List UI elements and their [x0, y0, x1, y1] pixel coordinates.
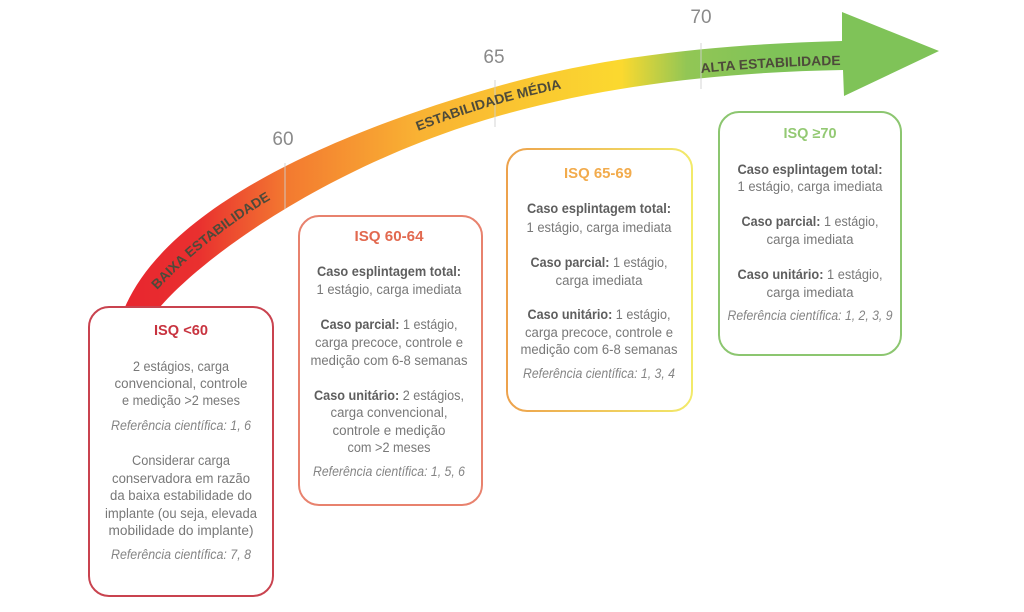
scale tick: 65: 65: [483, 47, 505, 68]
text: partial case: Caso parcial: 1 estágio,: [742, 214, 878, 229]
text: partial case: [530, 255, 668, 288]
text: full arch case: Caso esplintagem total:: [738, 162, 882, 177]
heading: ISQ 65-69: ISQ 65-69: [564, 166, 632, 182]
reference: 7, 8: Referência científica: 7, 8: [111, 547, 251, 562]
text: conservative load: Considerar carga: [132, 453, 230, 468]
reference: 1, 2, 3, 9: Referência científica: 1, 2, 3, 9: [728, 308, 893, 323]
text: single case: carga convencional,: [330, 405, 448, 420]
heading: ISQ under 60: ISQ <60: [154, 323, 208, 339]
text: partial case: carga imediata: [556, 273, 643, 288]
panel: ISQ 65-69: [507, 149, 692, 411]
arrow: stability gradient: [125, 12, 939, 307]
heading: ISQ 70 or more: ISQ ≥70: [784, 126, 836, 142]
text: partial case: carga precoce, controle e: [315, 335, 463, 350]
scale tick: 60: [272, 129, 294, 209]
text: partial case: Caso parcial: 1 estágio,: [320, 317, 458, 332]
text: single case: [520, 307, 678, 357]
text: treatment: convencional, controle: [114, 376, 248, 391]
text: partial case: Caso parcial: 1 estágio,: [530, 255, 668, 270]
text: conservative load: conservadora em razão: [112, 471, 250, 486]
text: full arch case: Caso esplintagem total:: [317, 264, 461, 279]
text: conservative load: implante (ou seja, elevada: [105, 506, 257, 521]
reference: 1, 5, 6: Referência científica: 1, 5, 6: [313, 464, 465, 479]
text: conservative load: mobilidade do implante): [108, 523, 254, 538]
panel: ISQ 60-64: [299, 216, 482, 505]
label: alta estabilidade: ALTA ESTABILIDADE: [701, 56, 840, 73]
text: partial case: [310, 317, 468, 368]
text: full arch case: [526, 201, 672, 235]
text: single case: com >2 meses: [348, 440, 431, 455]
text: partial case: [742, 214, 878, 247]
text: single case: Caso unitário: 1 estágio,: [528, 307, 670, 322]
text: single case: Caso unitário: 1 estágio,: [738, 267, 883, 282]
reference: 1, 3, 4: Referência científica: 1, 3, 4: [523, 366, 675, 381]
text: full arch case: [738, 162, 883, 194]
text: single case: controle e medição: [332, 423, 446, 438]
text: partial case: carga imediata: [766, 232, 854, 247]
label: estabilidade media: ESTABILIDADE MÉDIA: [416, 80, 562, 131]
text: single case: medição com 6-8 semanas: [520, 342, 678, 357]
scale tick: 65: [483, 47, 505, 127]
text: conservative load: [105, 453, 257, 538]
text: treatment: 2 estágios, carga: [133, 359, 229, 374]
text: single case: [738, 267, 883, 300]
text: full arch case: 1 estágio, carga imediata: [316, 282, 462, 297]
text: treatment: [114, 359, 248, 408]
scale tick: 70: [690, 7, 712, 89]
scale tick: 70: 70: [690, 7, 712, 28]
heading: ISQ 60-64: ISQ 60-64: [354, 229, 424, 245]
text: full arch case: [316, 264, 462, 297]
text: treatment: e medição >2 meses: [122, 393, 240, 408]
text: partial case: medição com 6-8 semanas: [310, 353, 468, 368]
text: single case: carga imediata: [766, 285, 854, 300]
text: conservative load: da baixa estabilidade do: [110, 488, 252, 503]
text: full arch case: 1 estágio, carga imediata: [526, 220, 672, 235]
panel: ISQ under 60: [89, 307, 273, 596]
reference: 1, 6: Referência científica: 1, 6: [111, 418, 251, 433]
text: single case: carga precoce, controle e: [525, 325, 673, 340]
text: full arch case: 1 estágio, carga imediata: [738, 179, 883, 194]
text: single case: Caso unitário: 2 estágios,: [314, 388, 464, 403]
text: full arch case: Caso esplintagem total:: [527, 201, 671, 216]
panel: ISQ 70 or more: [719, 112, 901, 355]
text: single case: [314, 388, 464, 455]
scale tick: 60: 60: [272, 129, 294, 150]
label: baixa estabilidade: BAIXA ESTABILIDADE: [151, 192, 270, 290]
